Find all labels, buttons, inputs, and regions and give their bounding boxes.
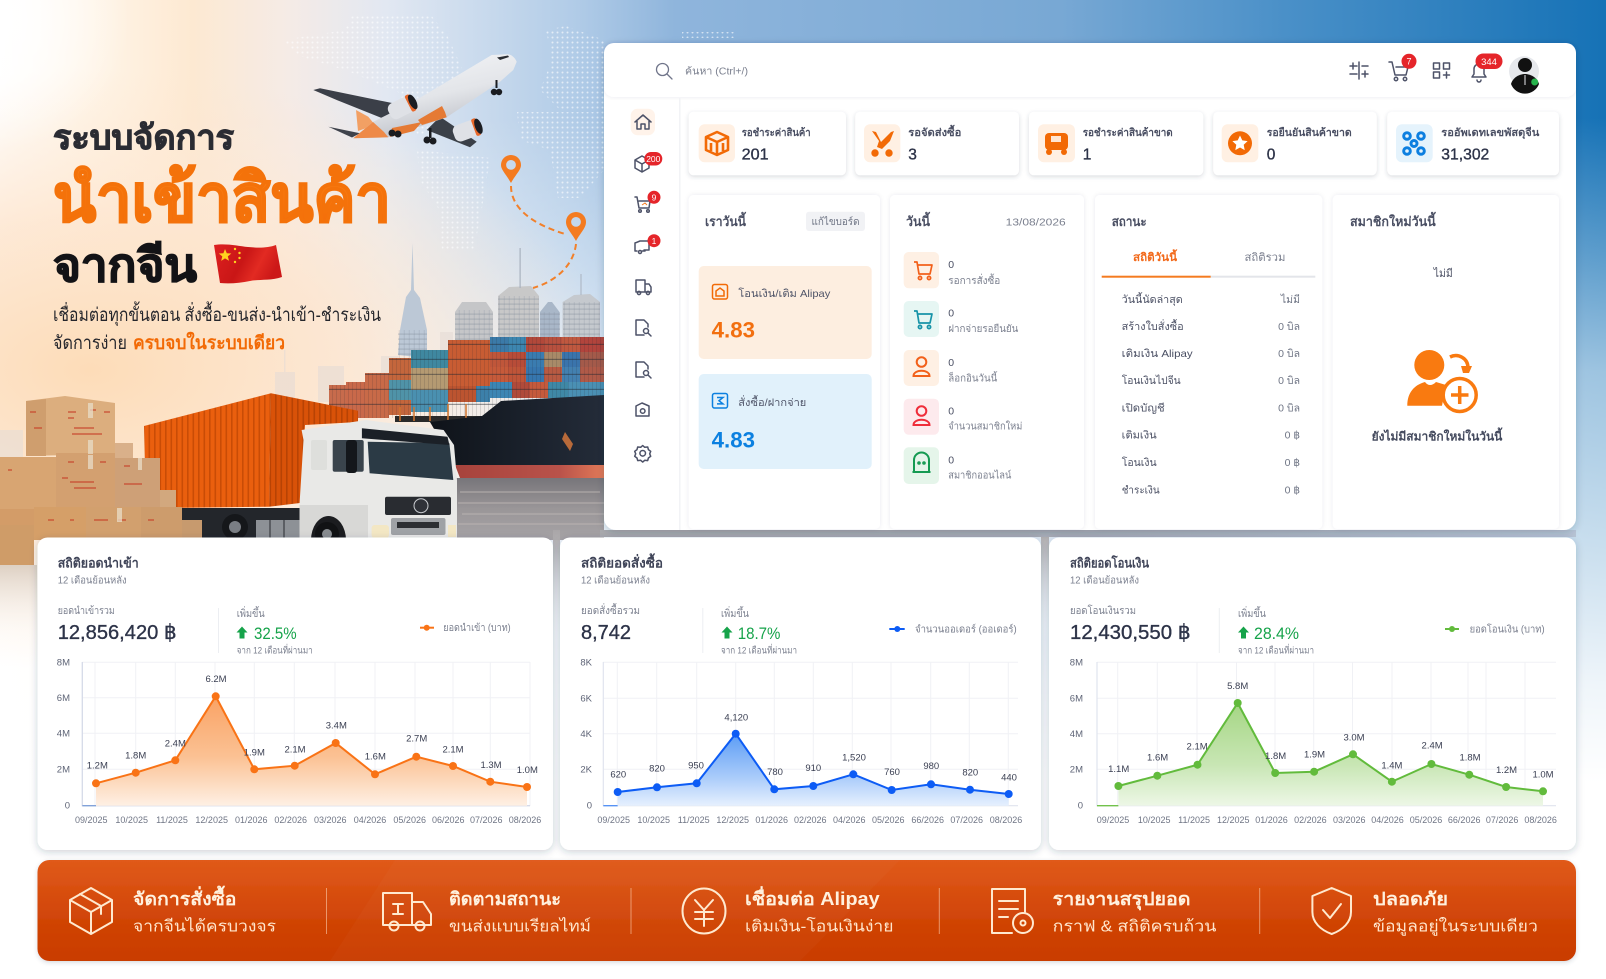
chart: import line: 6.2M — [205, 674, 227, 685]
growth value: 18.7% — [738, 624, 780, 643]
chart: import line: 8M — [57, 658, 70, 668]
row: new members — [904, 399, 1022, 435]
chart: import line: 1.2M — [87, 761, 108, 772]
chart: orders line: 760 — [884, 767, 900, 778]
chart: orders line: 8K — [580, 658, 593, 668]
chart: import line: 2.4M — [165, 738, 186, 749]
KPI: pending missing goods confirmation — [1213, 112, 1377, 175]
feature: summary reports: กราฟ & สถิติครบถ้วน — [1053, 918, 1216, 936]
status rows: 0 ฿ — [1285, 457, 1300, 469]
chart: transfers line: 1.8M — [1459, 753, 1481, 764]
row: logins today: 0 — [948, 357, 954, 369]
total label: ยอดสั่งซื้อรวม — [581, 603, 640, 617]
chart: orders line: 0 — [587, 800, 592, 812]
KPI cards — [689, 112, 1559, 175]
chart: import line: 1.6M — [365, 752, 386, 763]
illustration: container stacks on ship — [329, 337, 604, 422]
chart: import line: 2.7M — [406, 733, 427, 744]
chart: orders line: 09/2025 — [597, 815, 630, 825]
row: new members: 0 — [948, 405, 954, 417]
icon: camera box — [636, 403, 649, 416]
chart: import line: 2.1M — [442, 745, 464, 756]
headline — [53, 119, 391, 353]
chart: orders line: 66/2026 — [911, 815, 944, 825]
panel: status — [1095, 195, 1322, 529]
status rows: 0 ฿ — [1285, 484, 1300, 496]
chart: orders line: 08/2026 — [990, 815, 1022, 825]
total value: 12,430,550 ฿ — [1070, 621, 1191, 644]
chart card: transfer stats — [1049, 538, 1576, 850]
row: deposits pending: 0 — [948, 308, 954, 320]
icon: truck — [636, 280, 651, 295]
feature: order management — [70, 885, 276, 936]
chart: transfers line: 1.1M — [1108, 764, 1129, 775]
sidebar — [631, 98, 680, 530]
icon: settings — [635, 446, 651, 462]
row: online members — [904, 447, 1011, 484]
chart: transfers line: 2.4M — [1422, 741, 1443, 752]
growth value: 28.4% — [1254, 624, 1299, 643]
feature: Alipay connection: เชื่อมต่อ Alipay — [745, 886, 880, 909]
status rows: โอนเงินไปจีน — [1122, 374, 1181, 387]
legend: จำนวนออเดอร์ (ออเดอร์) — [915, 624, 1017, 636]
route dashed line — [511, 186, 576, 288]
panel: new members today — [1333, 195, 1559, 529]
chart: transfers line: 01/2026 — [1255, 815, 1288, 825]
chart: import line: 05/2026 — [393, 815, 426, 825]
status rows: เติมเงิน — [1122, 430, 1157, 442]
icon: box with badge — [635, 152, 662, 172]
dotted world map — [283, 14, 734, 250]
icon: search — [656, 64, 672, 79]
KPI: pending order shipping: รอจัดส่งซื้อ — [908, 124, 961, 139]
subtitle highlight: ครบจบในระบบเดียว — [133, 331, 285, 353]
chart: orders line: 11/2025 — [678, 815, 710, 825]
row: deposits pending: ฝากจ่ายรอยืนยัน — [948, 323, 1018, 335]
icon: bell with badge: 344 — [1481, 57, 1497, 68]
header bar — [604, 43, 1576, 97]
legend — [420, 622, 511, 634]
feature: status tracking — [383, 889, 591, 936]
growth value: 32.5% — [254, 624, 297, 643]
chart: transfers line: 09/2025 — [1097, 815, 1129, 825]
heading: สถานะ — [1112, 214, 1147, 229]
chart: transfers line: 3.0M — [1343, 733, 1365, 744]
chart: transfers line: 1.4M — [1381, 760, 1403, 771]
row: pending orders: 0 — [948, 259, 954, 271]
chart: orders line: 440 — [1001, 773, 1017, 784]
card subheading: 12 เดือนย้อนหลัง — [581, 574, 650, 586]
card subheading: 12 เดือนย้อนหลัง — [58, 574, 127, 586]
chart: transfers line: 66/2026 — [1448, 815, 1480, 825]
row: new members: จำนวนสมาชิกใหม่ — [948, 420, 1022, 432]
status rows: เติมเงิน Alipay — [1122, 348, 1194, 360]
growth value — [236, 624, 297, 643]
KPI: pending order shipping: 3 — [908, 146, 917, 164]
chart: transfers line: 2M — [1070, 764, 1083, 776]
KPI: pending order shipping — [855, 112, 1019, 175]
feature: order management: จัดการสั่งซื้อ — [133, 885, 236, 909]
legend — [1445, 622, 1545, 636]
chart: import line: 2.1M — [284, 745, 306, 756]
chart: import line: 2M — [57, 764, 70, 776]
KPI: pending product payment — [689, 112, 846, 175]
icon: map pin 2 — [566, 212, 586, 241]
card heading: สถิติยอดนำเข้า — [58, 556, 139, 570]
chart card: import stats — [38, 538, 553, 850]
KPI: pending China parcel updates: 31,302 — [1441, 146, 1489, 164]
chart: import line: 04/2026 — [354, 815, 386, 825]
chart: import line — [57, 658, 541, 825]
KPI: pending missing goods confirmation: รอยืนยันสินค้าขาด — [1267, 126, 1352, 139]
growth label: เพิ่มขึ้น — [721, 606, 749, 620]
chart: transfers line: 03/2026 — [1333, 815, 1366, 825]
chart: import line: 1.8M — [125, 750, 146, 761]
status rows — [1122, 292, 1300, 496]
icon: apps — [1434, 63, 1450, 78]
title line 3: จากจีน — [53, 239, 198, 291]
chart: transfers line: 02/2026 — [1294, 815, 1327, 825]
tab: total stats: สถิติรวม — [1244, 252, 1286, 264]
feature: security: ข้อมูลอยู่ในระบบเดียว — [1373, 916, 1538, 936]
row: pending orders — [904, 252, 1000, 288]
KPI: pending missing goods payment: 1 — [1083, 146, 1091, 164]
chart: orders line: 10/2025 — [637, 815, 670, 825]
chart: import line: 06/2026 — [432, 815, 465, 825]
status rows: 0 บิล — [1278, 375, 1300, 387]
illustration: cargo ship — [430, 395, 604, 478]
chart: transfers line: 11/2025 — [1178, 815, 1210, 825]
feature: summary reports: รายงานสรุปยอด — [1053, 889, 1190, 911]
chart: transfers line: 1.9M — [1304, 750, 1325, 761]
chart: import line: 0 — [65, 800, 70, 812]
chart: orders line — [580, 658, 1022, 825]
feature: security — [1312, 888, 1538, 936]
row: pending orders: รอการสั่งซื้อ — [948, 273, 1000, 287]
feature: status tracking: ขนส่งแบบเรียลไทม์ — [449, 916, 591, 936]
KPI: pending missing goods payment — [1029, 112, 1203, 175]
chart: import line: 1.0M — [517, 765, 538, 776]
icon: chat truck with badge: 1 — [652, 236, 657, 246]
chart: orders line: 820 — [962, 768, 978, 779]
status rows: 0 บิล — [1278, 402, 1300, 414]
icon: document search — [636, 362, 651, 378]
chart card: order stats — [560, 538, 1041, 850]
row: online members: สมาชิกออนไลน์ — [948, 470, 1011, 482]
chart: orders line: 6K — [580, 694, 593, 704]
chart: transfers line: 1.0M — [1532, 769, 1554, 780]
chart: import line: 03/2026 — [314, 815, 347, 825]
edit board button: แก้ไขบอร์ด — [812, 216, 860, 228]
lower margin reflections — [0, 530, 1576, 650]
icon: document search — [636, 320, 651, 336]
KPI: pending missing goods payment: รอชำระค่าสินค้าขาด — [1083, 126, 1173, 139]
chart: orders line: 04/2026 — [833, 815, 866, 825]
city skyline — [0, 243, 600, 460]
water — [455, 478, 604, 540]
chart: transfers line: 07/2026 — [1486, 815, 1518, 825]
status rows: ไม่มี — [1280, 293, 1300, 306]
chart: transfers line: 04/2026 — [1371, 815, 1404, 825]
status rows: 0 บิล — [1278, 321, 1300, 333]
chart: transfers line: 5.8M — [1227, 681, 1248, 692]
chart: transfers line: 1.6M — [1147, 753, 1168, 764]
heading: วันนี้ — [906, 211, 931, 229]
legend: ยอดโอนเงิน (บาท) — [1470, 622, 1545, 636]
edit board button — [806, 212, 865, 231]
chart: orders line: 4K — [580, 729, 593, 740]
card subheading: 12 เดือนย้อนหลัง — [1070, 574, 1139, 586]
row: logins today — [904, 350, 998, 386]
icon: add member — [1407, 350, 1476, 412]
status rows: โอนเงิน — [1122, 456, 1157, 469]
chart: orders line: 910 — [805, 763, 821, 774]
chart: orders line: 05/2026 — [872, 815, 905, 825]
icon: chat truck with badge — [635, 234, 660, 254]
chart: orders line: 01/2026 — [755, 815, 788, 825]
chart: import line: 12/2025 — [195, 815, 228, 825]
total label: ยอดโอนเงินรวม — [1070, 604, 1136, 617]
chart: import line: 09/2025 — [75, 815, 108, 825]
subtitle line 1: เชื่อมต่อทุกขั้นตอน สั่งซื้อ-ขนส่ง-นำเข้า-ชำระเงิน — [53, 301, 381, 327]
subtitle line 2: จัดการง่าย — [53, 332, 127, 353]
chart: orders line: 620 — [610, 770, 626, 781]
chart: transfers line — [1070, 658, 1557, 825]
search placeholder: ค้นหา (Ctrl+/) — [685, 66, 748, 78]
status rows: เปิดบัญชี — [1122, 402, 1165, 414]
growth note: จาก 12 เดือนที่ผ่านมา — [721, 644, 797, 656]
total value: 12,856,420 ฿ — [58, 621, 177, 644]
icon: sliders — [1350, 62, 1368, 79]
card: alipay transfer: 4.83 — [712, 318, 755, 342]
card heading: สถิติยอดสั่งซื้อ — [581, 552, 663, 570]
illustration: airplane — [313, 54, 517, 147]
KPI: pending China parcel updates: รออัพเดทเลขพัสดุจีน — [1441, 126, 1540, 140]
chart: transfers line: 0 — [1078, 800, 1083, 812]
chart: transfers line: 6M — [1070, 694, 1083, 704]
chart: orders line: 1,520 — [842, 752, 866, 763]
none label: ไม่มี — [1433, 267, 1453, 280]
row: online members: 0 — [948, 455, 954, 467]
avatar — [1509, 56, 1539, 94]
legend: ยอดนำเข้า (บาท) — [443, 622, 511, 634]
chart: import line: 01/2026 — [235, 815, 268, 825]
growth label: เพิ่มขึ้น — [1238, 606, 1266, 620]
icon: bell with badge — [1472, 54, 1502, 82]
icon: map pin 1 — [501, 155, 521, 183]
chart: orders line: 4,120 — [724, 713, 748, 724]
empty state text: ยังไม่มีสมาชิกใหม่ในวันนี้ — [1372, 426, 1503, 444]
chart: transfers line: 08/2026 — [1524, 815, 1557, 825]
chart: transfers line: 05/2026 — [1410, 815, 1442, 825]
feature: security: ปลอดภัย — [1373, 889, 1448, 909]
chart: transfers line: 12/2025 — [1217, 815, 1250, 825]
feature: summary reports — [992, 889, 1216, 936]
total value: 8,742 — [581, 621, 631, 644]
status rows: ชำระเงิน — [1122, 484, 1160, 496]
chart: import line: 11/2025 — [156, 815, 188, 825]
card: alipay transfer — [699, 266, 872, 359]
growth value — [722, 624, 780, 643]
icon: cart with badge — [1389, 54, 1416, 81]
icon: home — [635, 115, 651, 129]
chart: import line: 1.9M — [244, 748, 265, 759]
row: logins today: ล็อกอินวันนี้ — [948, 370, 998, 384]
chart: import line: 02/2026 — [274, 815, 307, 825]
illustration: container — [144, 393, 358, 508]
chart: transfers line: 1.8M — [1265, 751, 1286, 762]
card: alipay transfer: โอนเงิน/เติม Alipay — [738, 287, 831, 300]
card: orders and deposit — [699, 374, 872, 469]
chart: import line: 4M — [57, 728, 70, 740]
KPI: pending product payment: รอชำระค่าสินค้า — [742, 126, 811, 139]
date: 13/08/2026 — [1006, 216, 1066, 228]
icon: cart with badge — [635, 191, 660, 212]
panel: dashboard — [604, 43, 1576, 530]
chart: import line: 10/2025 — [115, 815, 148, 825]
icon: cart with badge: 7 — [1406, 56, 1412, 66]
feature: order management: จากจีนได้ครบวงจร — [133, 916, 276, 936]
feature: Alipay connection: เติมเงิน-โอนเงินง่าย — [745, 916, 894, 936]
chart: transfers line: 8M — [1070, 658, 1083, 668]
card heading: สถิติยอดโอนเงิน — [1070, 554, 1149, 570]
chart: import line: 1.3M — [480, 760, 502, 771]
row: deposits pending — [904, 301, 1018, 337]
chart: orders line: 950 — [688, 760, 704, 771]
panel: our today — [689, 195, 880, 529]
chart: transfers line: 4M — [1070, 729, 1083, 740]
status rows: 0 ฿ — [1285, 430, 1300, 442]
card: orders and deposit: 4.83 — [712, 428, 755, 452]
growth note: จาก 12 เดือนที่ผ่านมา — [237, 644, 313, 656]
status rows: 0 บิล — [1278, 348, 1300, 360]
illustration: cardboard boxes — [0, 396, 202, 565]
chart: import line: 3.4M — [326, 720, 347, 731]
chart: orders line: 12/2025 — [716, 815, 749, 825]
icon: box with badge: 200 — [646, 154, 661, 164]
card: orders and deposit: สั่งซื้อ/ฝากจ่าย — [738, 395, 806, 409]
KPI: pending product payment: 201 — [742, 146, 769, 164]
chart: import line: 07/2026 — [470, 815, 503, 825]
icon: cart with badge: 9 — [652, 192, 657, 202]
growth note: จาก 12 เดือนที่ผ่านมา — [1238, 644, 1314, 656]
heading: เราวันนี้ — [705, 211, 746, 229]
chart: orders line: 780 — [767, 767, 783, 778]
KPI: pending China parcel updates — [1387, 112, 1559, 175]
title line 2: นำเข้าสินค้า — [53, 161, 391, 235]
growth label: เพิ่มขึ้น — [237, 606, 265, 620]
chart: orders line: 2K — [580, 764, 593, 776]
icon: China flag — [214, 244, 282, 283]
feature: status tracking: ติดตามสถานะ — [449, 889, 561, 909]
chart: import line: 6M — [57, 693, 70, 704]
status rows: สร้างใบสั่งซื้อ — [1122, 319, 1184, 333]
feature banner — [38, 860, 1576, 961]
illustration: truck — [182, 420, 457, 546]
chart: transfers line: 2.1M — [1187, 742, 1208, 753]
total label: ยอดนำเข้ารวม — [58, 605, 115, 617]
chart: import line: 08/2026 — [509, 815, 541, 825]
heading: สมาชิกใหม่วันนี้ — [1350, 211, 1436, 229]
chart: orders line: 980 — [923, 761, 939, 772]
status rows: วันนี้นัดล่าสุด — [1122, 292, 1183, 306]
chart: transfers line: 10/2025 — [1138, 815, 1170, 825]
panel: today — [890, 195, 1084, 529]
feature: Alipay connection — [682, 886, 894, 936]
chart: transfers line: 1.2M — [1496, 765, 1517, 776]
chart: orders line: 02/2026 — [794, 815, 827, 825]
KPI: pending missing goods confirmation: 0 — [1267, 146, 1276, 164]
tab: today stats: สถิติวันนี้ — [1133, 249, 1178, 264]
chart: orders line: 820 — [649, 764, 665, 775]
title line 1: ระบบจัดการ — [53, 119, 235, 157]
chart: orders line: 07/2026 — [950, 815, 983, 825]
